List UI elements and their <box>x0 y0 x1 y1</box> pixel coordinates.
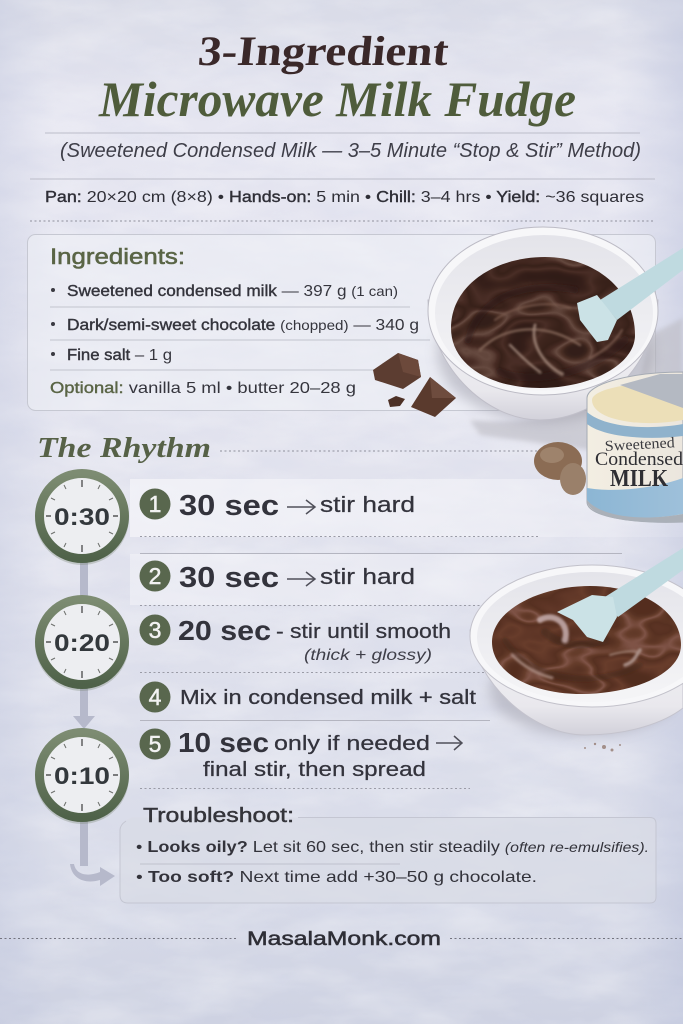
illustration: chocolate chunks <box>373 353 456 417</box>
heading: the rhythm: The Rhythm <box>37 433 211 464</box>
recipe facts line: Pan: 20×20 cm (8×8) • Hands-on: 5 min • Chill: 3–4 hrs • Yield: ~36 squares <box>45 189 644 206</box>
illustration: second chocolate bowl with spatula <box>470 548 683 736</box>
step 2: 2 <box>149 563 161 589</box>
timeline connectors <box>70 558 115 886</box>
step 1: stir hard <box>320 492 415 517</box>
timer: 0:20: 0:20 <box>54 630 110 657</box>
step 4 <box>140 682 477 712</box>
step 3 <box>140 614 451 664</box>
illustration: linen cloth <box>470 318 683 450</box>
step 4: Mix in condensed milk + salt <box>180 687 477 709</box>
tip: looks oily: • Looks oily? Let sit 60 sec, then stir steadily (often re-emulsifies). <box>136 839 649 856</box>
ingredient list: Fine salt – 1 g <box>67 347 172 364</box>
timer: 0:30: 0:30 <box>54 504 110 531</box>
subtitle: (Sweetened Condensed Milk — 3–5 Minute “Stop & Stir” Method) <box>60 140 641 162</box>
step 1 <box>140 488 415 522</box>
timer: 0:30 <box>35 471 129 565</box>
ingredient list <box>50 283 430 397</box>
title: 3-Ingredient <box>196 28 451 75</box>
heading: troubleshoot: Troubleshoot: <box>143 805 294 827</box>
step 3: 20 sec <box>178 615 271 646</box>
timer: 0:10 <box>35 730 129 824</box>
ingredient list: Dark/semi-sweet chocolate (chopped) — 340 g <box>67 317 419 334</box>
timer: 0:10: 0:10 <box>54 763 110 790</box>
ingredient list: Optional: vanilla 5 ml • butter 20–28 g <box>50 380 356 397</box>
can label: Sweetened <box>604 435 676 455</box>
panel: troubleshoot <box>120 805 656 903</box>
step 3: (thick + glossy) <box>304 647 432 664</box>
step 5: final stir, then spread <box>203 759 426 781</box>
title: Microwave Milk Fudge <box>98 71 576 127</box>
can label: MILK <box>610 466 668 492</box>
can label <box>595 435 683 492</box>
step 3: 3 <box>149 617 161 643</box>
step 5: only if needed <box>274 733 430 755</box>
step 1: 30 sec <box>179 490 279 522</box>
step 2 <box>140 560 415 594</box>
title <box>98 28 576 127</box>
illustration: nutmeg <box>534 442 586 495</box>
cocoa specks <box>584 743 621 752</box>
step 3: - stir until smooth <box>276 621 451 643</box>
step 5 <box>140 727 462 781</box>
panel: ingredients <box>28 234 656 410</box>
step 5: 5 <box>149 731 161 757</box>
heading: ingredients: Ingredients: <box>50 244 185 269</box>
step 5: 10 sec <box>178 727 269 758</box>
step 2: 30 sec <box>179 562 279 594</box>
step 4: 4 <box>149 684 162 710</box>
illustration: chocolate bowl with spatula <box>428 227 683 422</box>
footer: website: MasalaMonk.com <box>247 929 441 950</box>
step 2: stir hard <box>320 564 415 589</box>
panel: step rows <box>130 479 683 788</box>
step 1: 1 <box>149 491 161 517</box>
tip: too soft: • Too soft? Next time add +30–50 g chocolate. <box>136 869 537 886</box>
timer: 0:20 <box>35 597 129 691</box>
can label: Condensed <box>595 449 683 470</box>
ingredient list: Sweetened condensed milk — 397 g (1 can) <box>67 283 398 300</box>
illustration: condensed milk can <box>587 372 683 522</box>
